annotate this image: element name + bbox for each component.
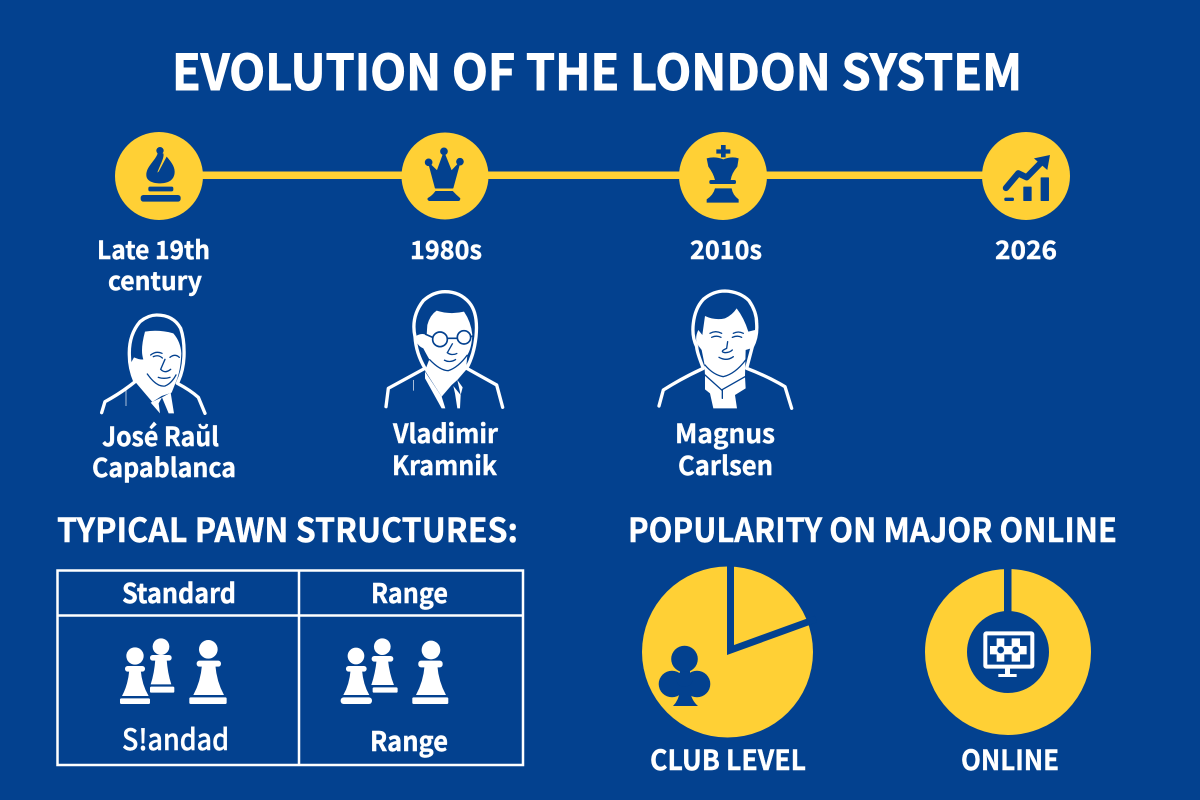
label: club level: CLUB LEVEL — [650, 739, 806, 779]
heading: typical pawn structures: TYPICAL PAWN STRUCTURES: — [57, 504, 518, 552]
date: 2026: 2026 — [995, 231, 1057, 267]
column header: Range: Range — [371, 572, 448, 611]
portrait: Kramnik — [386, 292, 503, 408]
icon: growth chart milestone — [982, 132, 1070, 220]
icon: standard pawns — [120, 638, 227, 704]
date: late 19th century — [97, 231, 210, 298]
panel: pawn structures table — [58, 570, 523, 765]
name: Vladimir Kramnik: Vladimir — [392, 414, 499, 451]
name: José Raŭl Capablanca: José Raŭl — [102, 417, 219, 454]
title: EVOLUTION OF THE LONDON SYSTEM — [172, 34, 1022, 105]
icon: bishop milestone — [115, 132, 203, 220]
column header: Standard: Standard — [122, 572, 236, 611]
date: late 19th century: Late 19th — [97, 231, 210, 267]
heading: popularity: POPULARITY ON MAJOR ONLINE — [628, 504, 1117, 552]
portrait: Carlsen — [659, 291, 792, 408]
name: Magnus Carlsen: Carlsen — [678, 446, 773, 483]
date: 2010s: 2010s — [690, 231, 762, 267]
portrait: Capablanca — [102, 315, 205, 413]
name: Vladimir Kramnik — [392, 414, 499, 483]
icon: club suit — [659, 646, 710, 706]
chart: online donut — [946, 562, 1070, 714]
chart: club level pie — [642, 562, 816, 738]
icon: king milestone — [679, 132, 767, 220]
caption: standard: S!andad — [122, 717, 229, 759]
caption: range: Range — [370, 720, 448, 759]
name: José Raŭl Capablanca — [92, 417, 236, 485]
date: late 19th century: century — [108, 262, 203, 298]
timeline — [115, 132, 1070, 220]
icon: monitor with chessboard — [985, 633, 1032, 677]
name: Magnus Carlsen: Magnus — [675, 414, 775, 451]
icon: range pawns — [341, 638, 448, 704]
name: José Raŭl Capablanca: Capablanca — [92, 448, 236, 485]
date: 1980s: 1980s — [410, 231, 482, 267]
name: Magnus Carlsen — [675, 414, 775, 483]
label: online: ONLINE — [961, 739, 1059, 779]
table grid — [58, 570, 523, 765]
timeline connector — [159, 172, 1026, 179]
icon: queen milestone — [402, 132, 488, 220]
name: Vladimir Kramnik: Kramnik — [392, 446, 497, 483]
